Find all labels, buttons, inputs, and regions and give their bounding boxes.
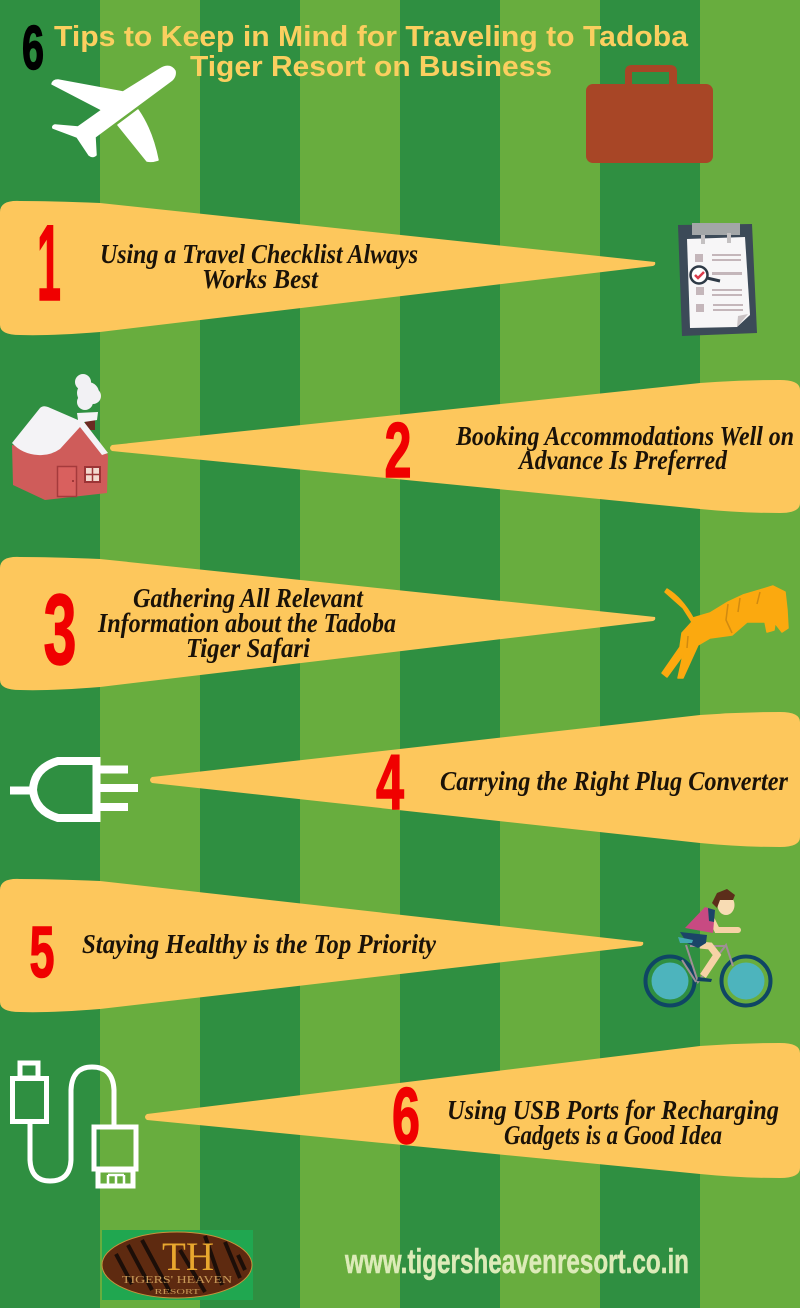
icon: tiger xyxy=(662,586,788,678)
tip 6 text: Gadgets is a Good Idea xyxy=(504,1120,722,1150)
tip 3 text xyxy=(97,583,396,663)
banner 1 xyxy=(0,201,655,335)
tip 3 text: Gathering All Relevant xyxy=(133,583,364,613)
number 3: 3 xyxy=(44,574,76,686)
tip 1 text: Works Best xyxy=(202,264,319,294)
banner 3 xyxy=(0,557,655,690)
tip 3 text: Information about the Tadoba xyxy=(97,608,396,638)
icon: USB cable xyxy=(12,1063,136,1186)
heading number 6: 6 xyxy=(22,14,44,83)
icon: plug xyxy=(10,761,138,818)
logo: Tigers' Heaven Resort: TIGERS' HEAVEN xyxy=(122,1274,232,1286)
icon: cyclist on bicycle xyxy=(646,889,770,1006)
title xyxy=(54,21,689,83)
number 5: 5 xyxy=(30,913,54,993)
logo: Tigers' Heaven Resort: RESORT xyxy=(154,1288,201,1296)
banner 2 xyxy=(110,380,800,513)
number 2: 2 xyxy=(384,406,412,494)
icon: briefcase xyxy=(586,65,713,163)
title: Tiger Resort on Business xyxy=(190,51,552,83)
tip 2 text: Advance Is Preferred xyxy=(517,445,727,475)
icon: airplane xyxy=(52,66,175,161)
icon: house xyxy=(12,374,108,500)
banner 5 xyxy=(0,879,643,1012)
number 4: 4 xyxy=(376,738,404,826)
banner 6 xyxy=(145,1043,800,1178)
tip 2 text xyxy=(455,421,794,475)
icon: clipboard xyxy=(678,223,757,336)
logo: Tigers' Heaven Resort: TH xyxy=(162,1234,214,1279)
tip 1 text xyxy=(100,239,418,294)
banner 4 xyxy=(150,712,800,847)
tip 3 text: Tiger Safari xyxy=(186,633,310,663)
tip 1 text: Using a Travel Checklist Always xyxy=(100,239,418,269)
banner 1: 1 xyxy=(37,202,61,323)
title: Tips to Keep in Mind for Traveling to Tadoba xyxy=(54,21,689,53)
tip 6 text xyxy=(447,1095,779,1150)
tip 5 text: Staying Healthy is the Top Priority xyxy=(82,929,437,959)
number 6: 6 xyxy=(392,1071,420,1160)
logo: Tigers' Heaven Resort xyxy=(102,1230,253,1300)
